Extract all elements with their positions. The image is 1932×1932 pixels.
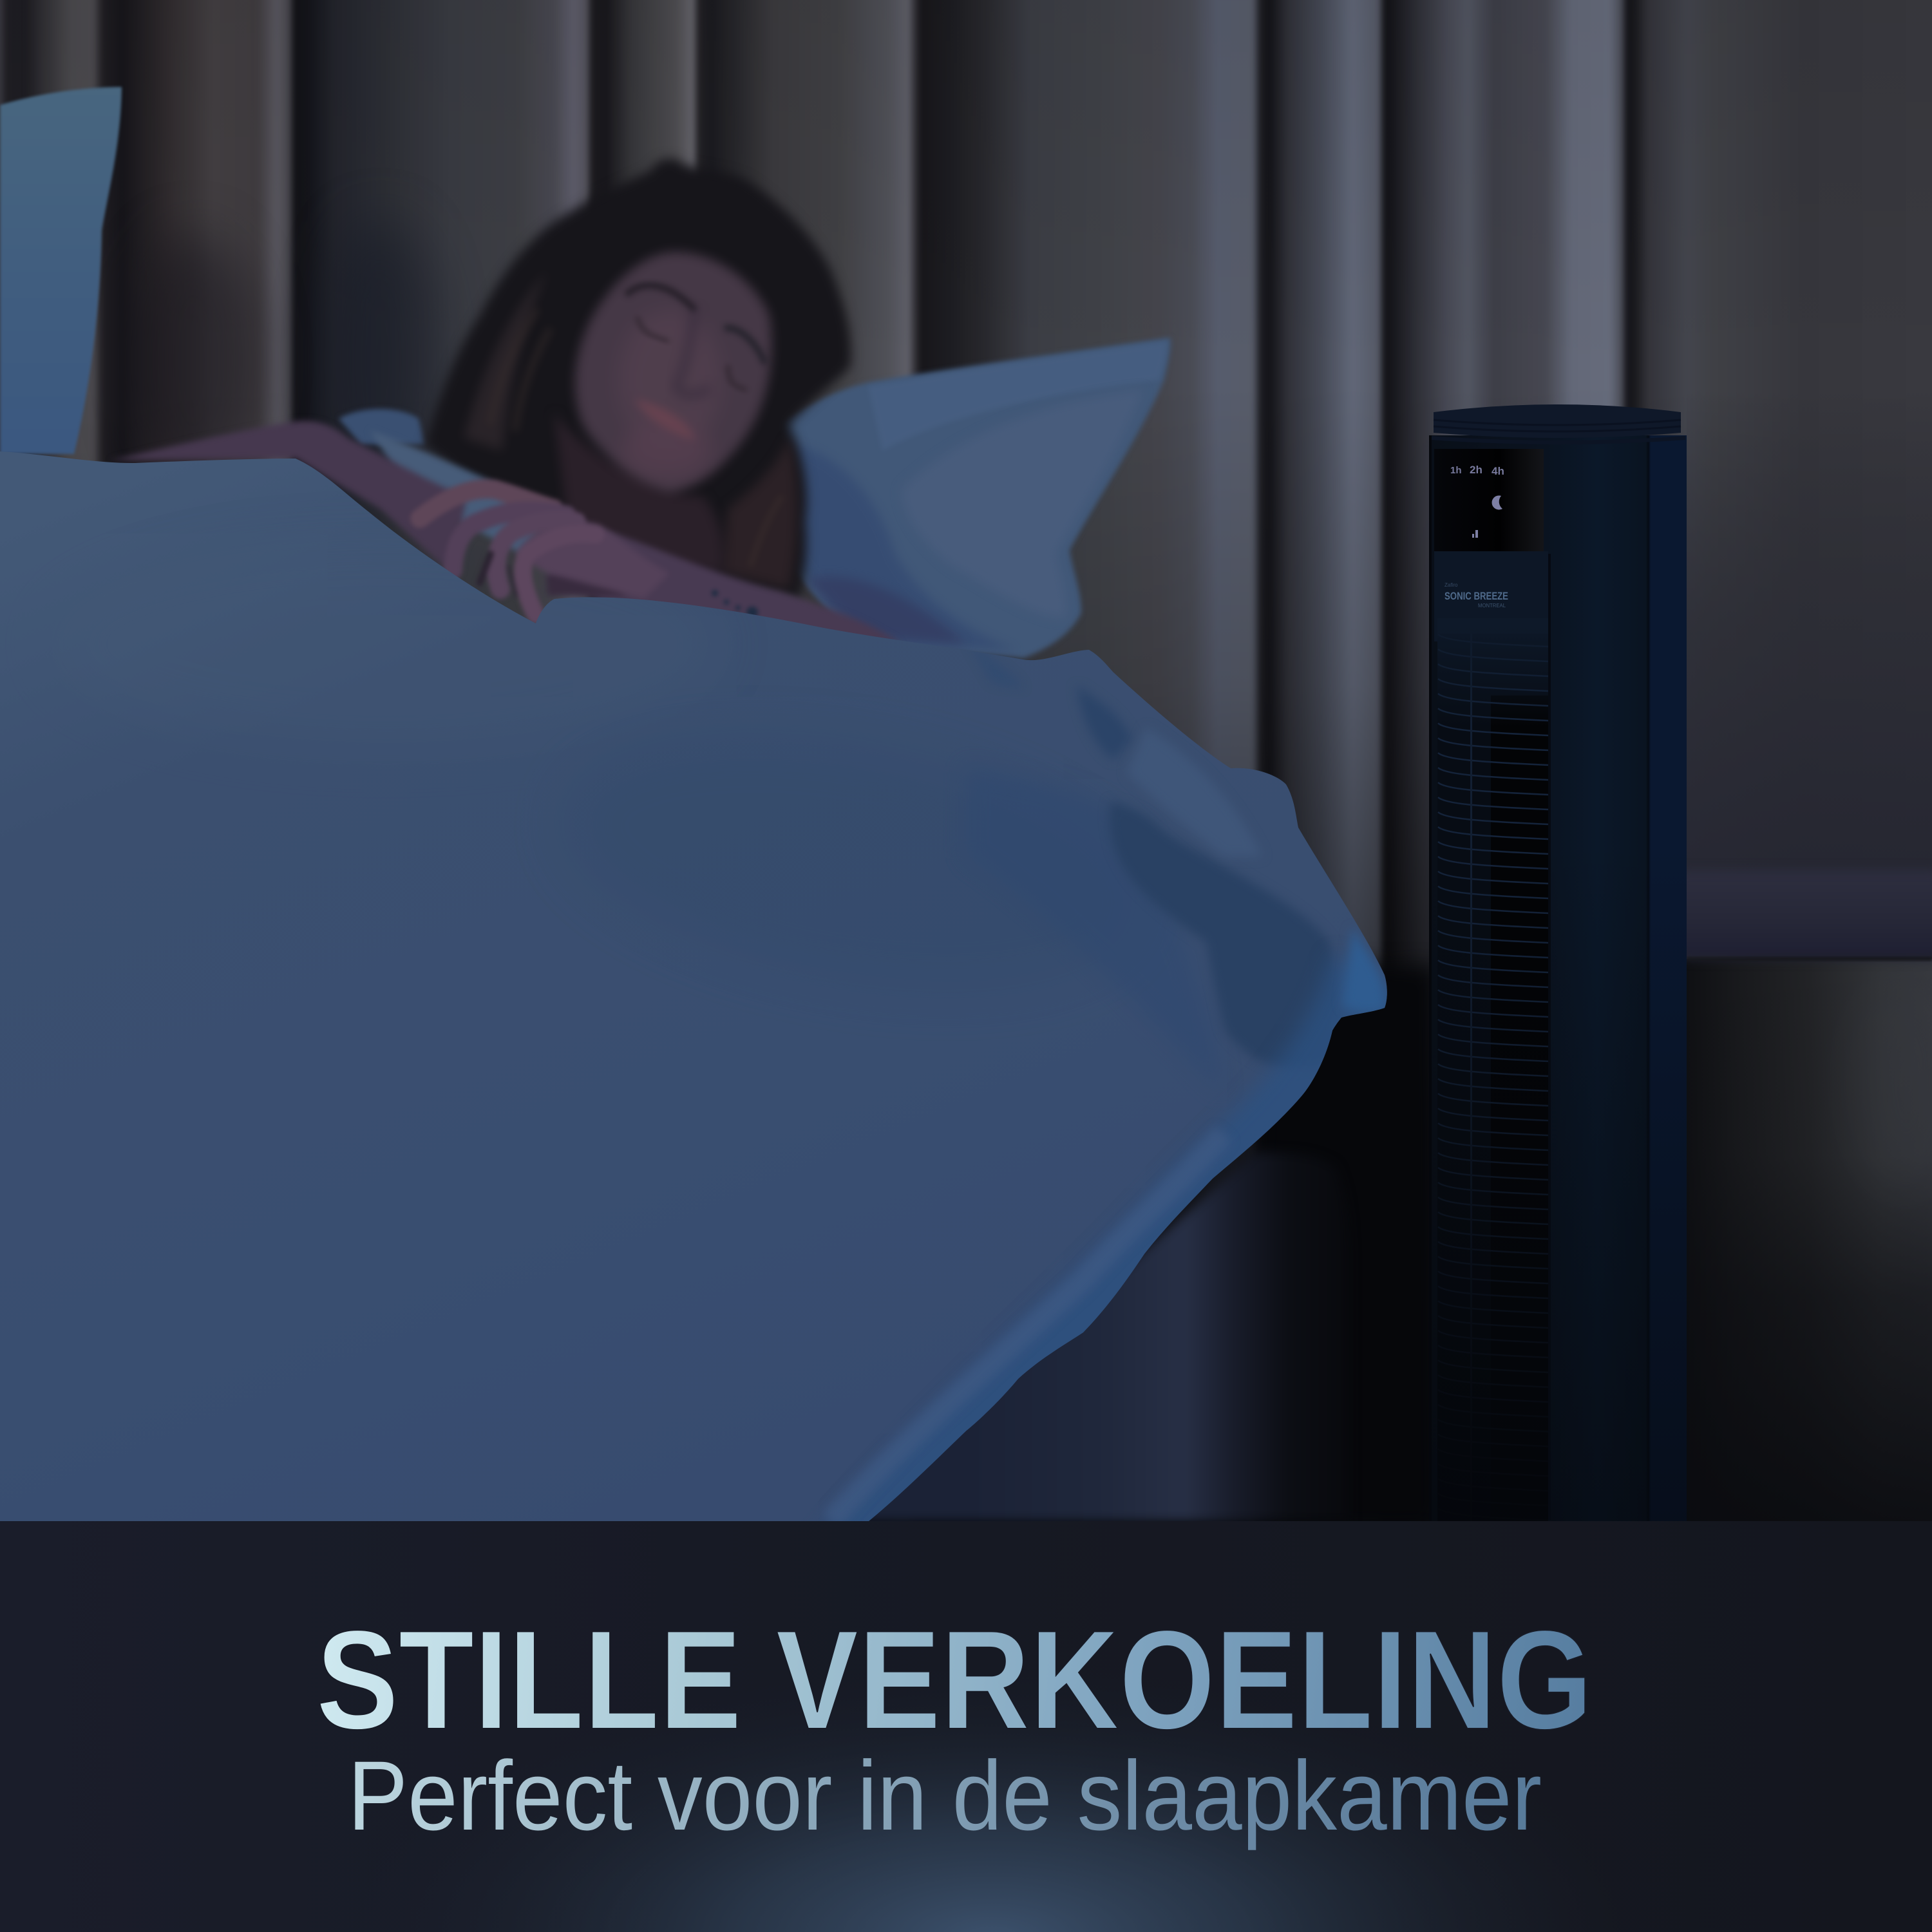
arm and hand (109, 421, 902, 644)
tattoo (712, 590, 758, 618)
control display: 1h (1450, 465, 1462, 476)
duvet (0, 451, 1430, 1578)
bed base (837, 966, 1436, 1526)
tower fan (1429, 404, 1687, 1524)
fan logo: MONTREAL (1478, 603, 1506, 609)
icon: fan speed bars (1472, 530, 1478, 538)
face (575, 252, 772, 493)
fan logo: Zafiro (1444, 582, 1458, 588)
fan logo: SONIC BREEZE (1444, 590, 1508, 602)
main pillow (779, 337, 1171, 658)
fan grill (1437, 618, 1548, 1521)
sheet beside arm (370, 430, 553, 554)
hair (425, 158, 851, 599)
curtains background (0, 0, 1932, 1540)
bottom text panel (0, 1521, 1932, 1932)
fan body (1430, 435, 1687, 1524)
duvet hem (811, 953, 1430, 1578)
title: STILLE VERKOELING (316, 1602, 1593, 1759)
control display (1434, 449, 1544, 551)
duvet folds (52, 541, 1338, 1095)
fan logo (1444, 582, 1508, 609)
left pillow (0, 87, 122, 454)
control display: 4h (1492, 465, 1504, 477)
pillow behind head (339, 409, 425, 444)
control display: 2h (1470, 464, 1482, 476)
woman (109, 158, 902, 644)
icon: moon (1492, 495, 1502, 509)
side table (1687, 873, 1932, 1482)
neck (556, 423, 721, 569)
fan lid (1431, 404, 1685, 442)
subtitle: Perfect voor in de slaapkamer (348, 1741, 1542, 1851)
